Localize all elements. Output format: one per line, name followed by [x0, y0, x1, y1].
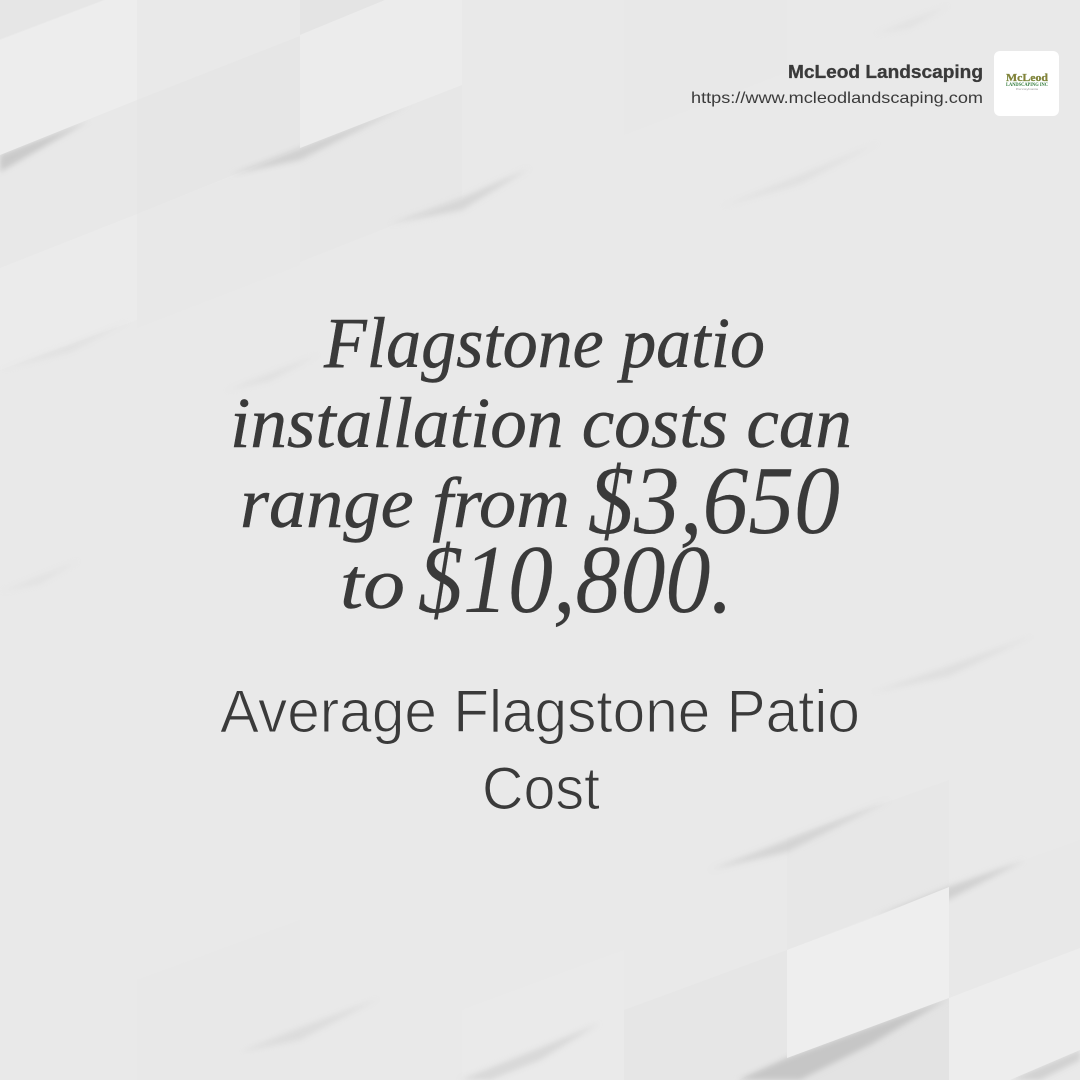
main heading: Flagstone patio: [323, 303, 765, 383]
company name and website: McLeod Landscaping: [788, 62, 983, 82]
main heading: $3,650: [588, 447, 840, 555]
company name and website: https://www.mcleodlandscaping.com: [691, 90, 983, 107]
light facets above the shadows: [0, 0, 137, 155]
logo card: [994, 51, 1059, 116]
main heading: $10,800.: [418, 526, 733, 634]
subtitle: [220, 678, 860, 822]
main heading: range from: [240, 463, 570, 543]
logo card: LANDSCAPING INC: [1006, 83, 1048, 88]
subtitle: Average Flagstone Patio: [220, 678, 860, 745]
logo card: Pennsylvania: [1016, 88, 1039, 91]
company name and website: [691, 62, 983, 107]
main heading: [230, 303, 852, 634]
main heading: installation costs can: [230, 383, 852, 463]
subtitle: Cost: [482, 755, 600, 822]
main heading: to: [340, 544, 405, 624]
logo card: McLeod: [1006, 72, 1048, 84]
